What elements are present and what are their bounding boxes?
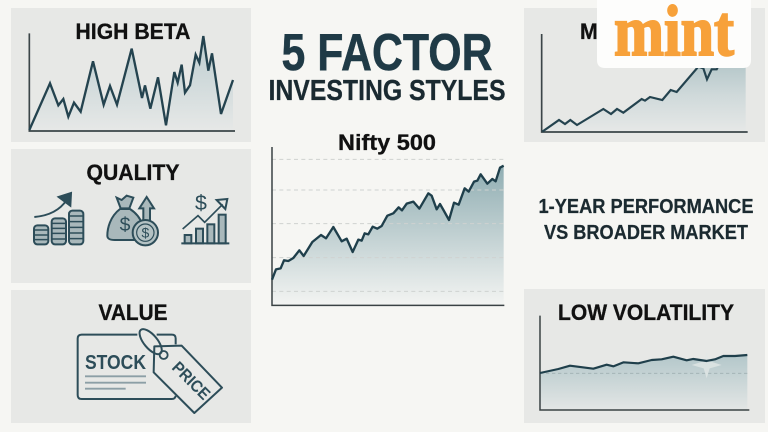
panel: high beta bbox=[11, 8, 251, 142]
text block: performance caption: 1-YEAR PERFORMANCE bbox=[538, 196, 754, 218]
heading: momentum: MOMENTUM bbox=[580, 19, 708, 44]
subtitle: INVESTING STYLES bbox=[268, 75, 506, 107]
heading: high beta: HIGH BETA bbox=[76, 19, 191, 44]
icon: price tag: PRICE bbox=[168, 358, 214, 404]
panel: low volatility bbox=[524, 289, 765, 423]
icon: stock certificate: STOCK bbox=[85, 352, 146, 374]
title bbox=[268, 24, 506, 107]
icon: money bag with coin and up arrow: $ bbox=[141, 225, 149, 241]
icon: price tag bbox=[136, 326, 222, 413]
heading: nifty 500: Nifty 500 bbox=[338, 130, 436, 155]
text block: performance caption bbox=[538, 196, 754, 244]
heading: value: VALUE bbox=[98, 300, 168, 325]
icon: stock certificate bbox=[78, 335, 176, 399]
icon: money bag with coin and up arrow bbox=[107, 196, 158, 245]
panel: momentum bbox=[524, 8, 765, 142]
icon: coin stacks with rising arrow bbox=[34, 193, 83, 244]
heading: quality: QUALITY bbox=[86, 160, 180, 185]
text block: performance caption: VS BROADER MARKET bbox=[544, 222, 748, 244]
icon: bar chart with dollar and arrow: $ bbox=[195, 191, 207, 215]
heading: low volatility: LOW VOLATILITY bbox=[558, 300, 734, 325]
icon: money bag with coin and up arrow: $ bbox=[120, 215, 131, 236]
chart: nifty 500 bbox=[272, 130, 504, 305]
panel: quality bbox=[11, 149, 251, 283]
chart: high beta line bbox=[29, 33, 235, 131]
title: 5 FACTOR bbox=[282, 24, 492, 82]
chart: low volatility line bbox=[540, 316, 749, 410]
icon: bar chart with dollar and arrow bbox=[181, 191, 229, 243]
chart: momentum line bbox=[542, 34, 748, 132]
panel: value bbox=[11, 290, 251, 423]
